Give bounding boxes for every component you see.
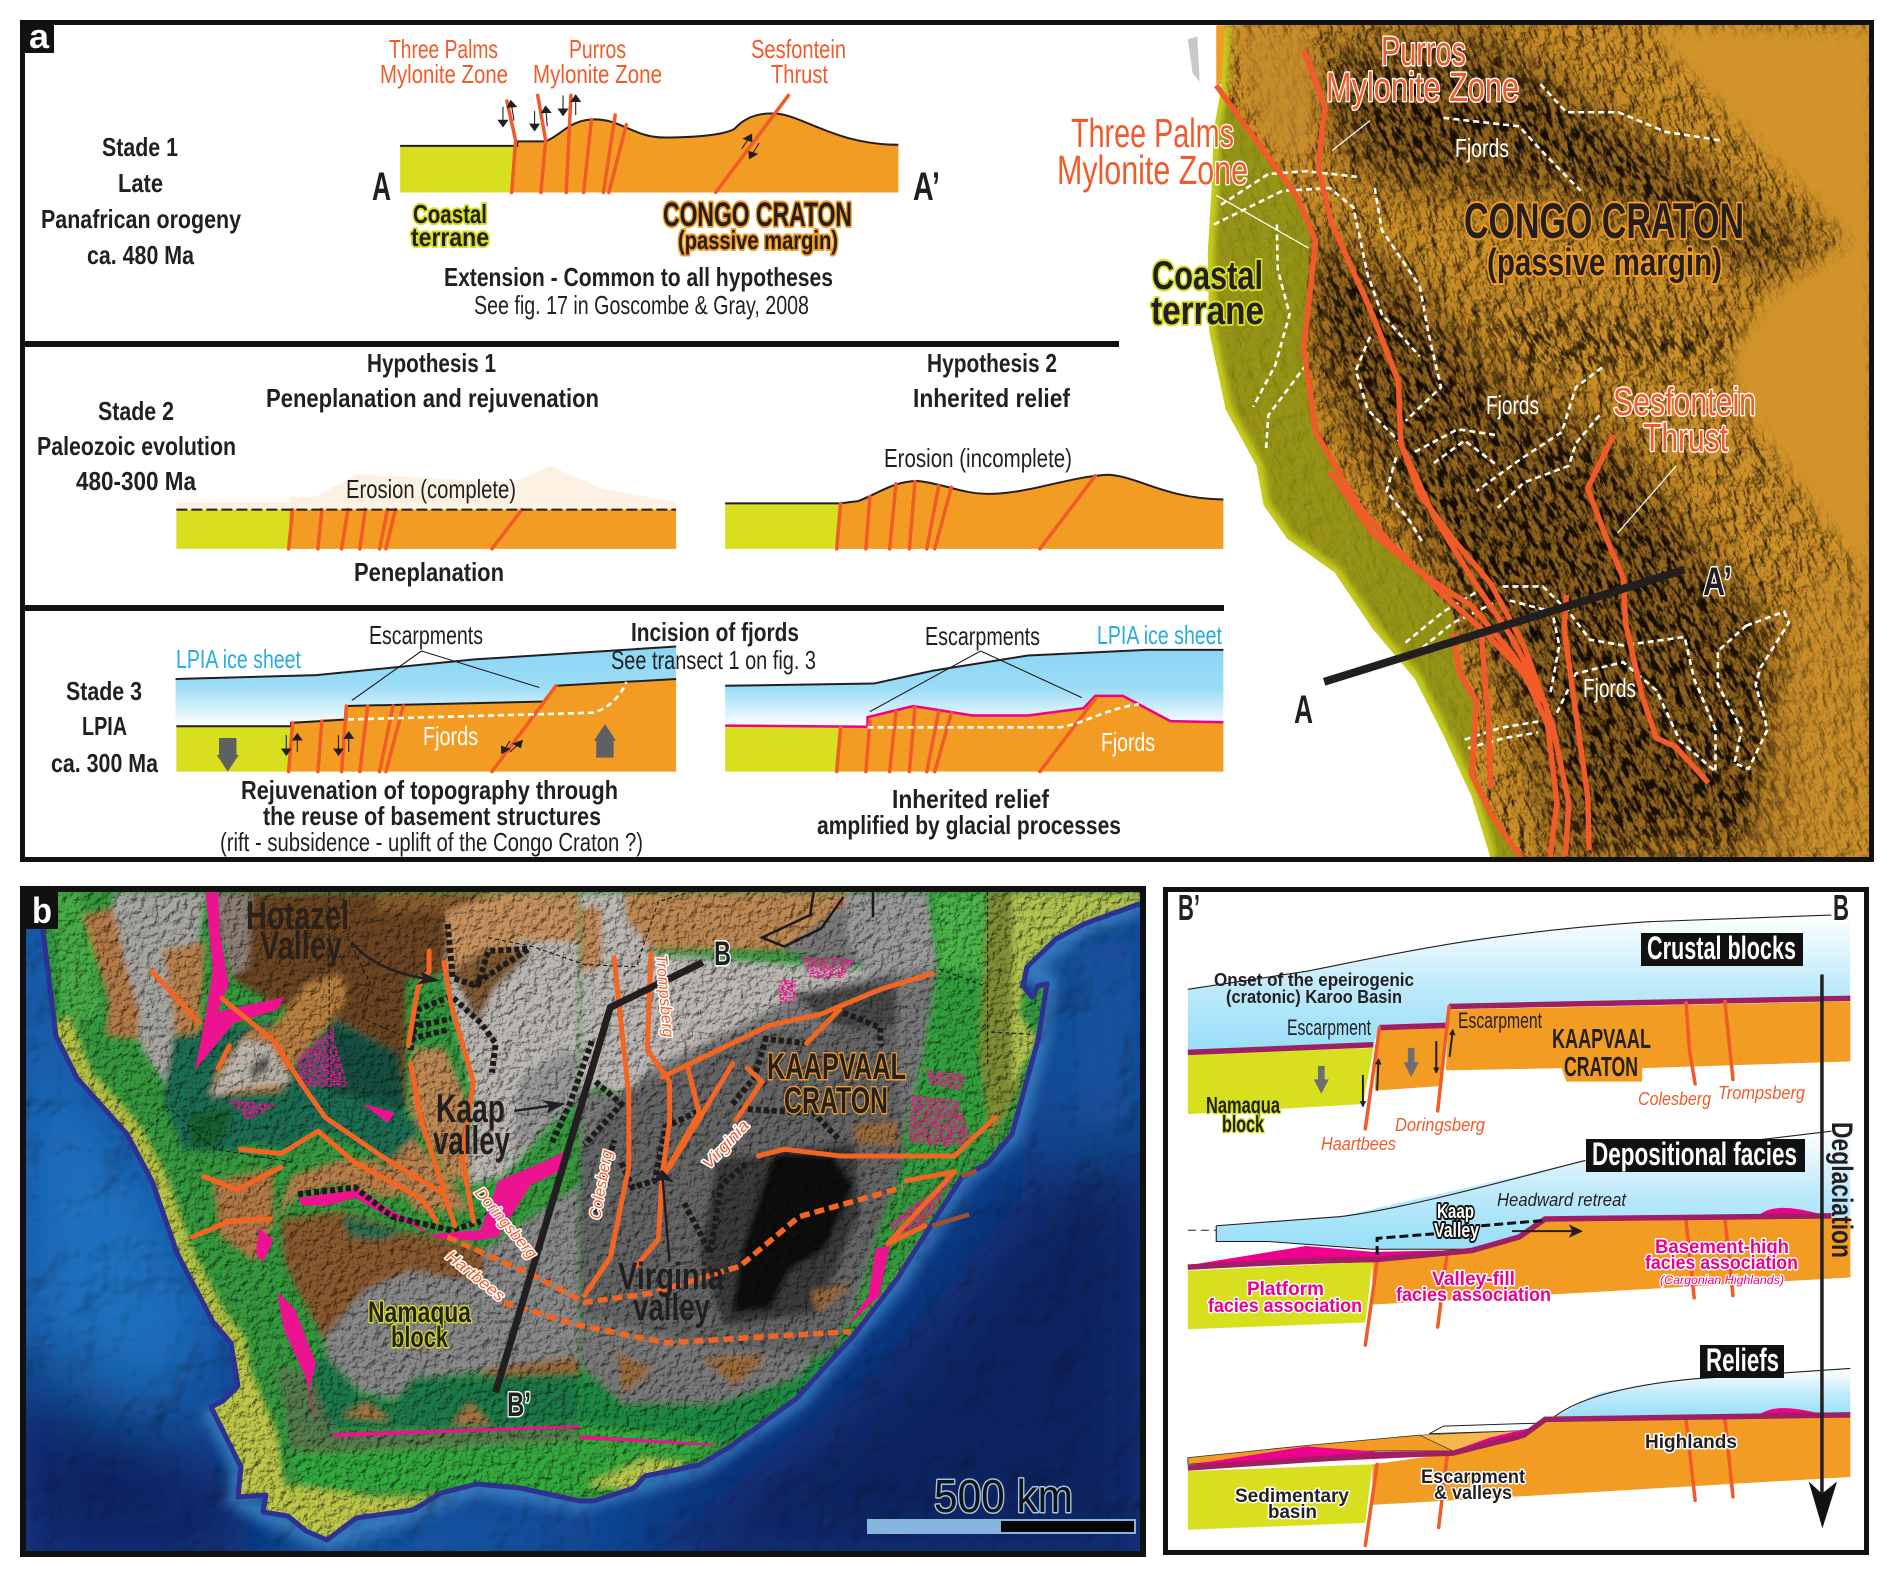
panel b: transect B'-B sections [1166, 887, 1866, 1552]
stage 1 annotations: Mylonite Zone [533, 59, 662, 89]
magenta deposits west [195, 892, 580, 1437]
map a labels: CONGO CRATON [1464, 193, 1744, 249]
ocean [10, 880, 1160, 1570]
section labels: Escarpment [1458, 1008, 1542, 1033]
stage labels: LPIA [82, 711, 127, 741]
map a labels [1057, 28, 1756, 732]
stage 1 annotations: A [372, 165, 391, 209]
map b labels: Hotazel [246, 894, 349, 938]
stage 3 annotations: Fjords [1101, 727, 1155, 757]
stage 3 annotations: See transect 1 on fig. 3 [611, 645, 816, 675]
section labels: Reliefs [1706, 1342, 1779, 1378]
stage 3 hypothesis 2 section [725, 650, 1223, 772]
scale bar: 500 km [934, 1470, 1073, 1522]
map a labels: Purros [1381, 28, 1466, 74]
stage 2 annotations: Peneplanation [354, 557, 504, 587]
stage 1 annotations: Coastal [413, 199, 487, 229]
section labels: Trompsberg [1718, 1083, 1805, 1103]
section labels: (cratonic) Karoo Basin [1226, 987, 1402, 1007]
stage labels: Stade 2 [98, 396, 174, 426]
land east half [580, 892, 1142, 1493]
map b labels: Valley [260, 924, 343, 968]
section labels: Onset of the epeirogenic [1214, 970, 1414, 990]
map a dark relief zones [1304, 25, 1840, 857]
map a labels: Thrust [1643, 417, 1728, 460]
map a labels: Mylonite Zone [1057, 147, 1248, 193]
stage 3 annotations: Fjords [423, 721, 478, 751]
stage 2 hypothesis 1 section [176, 466, 676, 549]
label b [24, 890, 58, 931]
stage labels: Late [118, 168, 163, 198]
coastline [43, 886, 1142, 1540]
stage 1 annotations: Mylonite Zone [380, 59, 508, 89]
map b labels: Virginia [699, 1117, 753, 1173]
section labels: (Cargonian Highlands) [1660, 1273, 1784, 1287]
deglaciation arrow [1809, 974, 1837, 1528]
section labels: block [1222, 1111, 1264, 1137]
stage 3 annotations: Inherited relief [892, 784, 1049, 814]
section labels: CRATON [1564, 1051, 1638, 1082]
section labels: Platform [1247, 1279, 1324, 1300]
stage 3 annotations: (rift - subsidence - uplift of the Congo Craton ?) [220, 827, 643, 857]
section labels: Sedimentary [1235, 1486, 1349, 1507]
stage 2 annotations: Peneplanation and rejuvenation [266, 383, 599, 413]
stage labels [37, 132, 241, 778]
map b labels: Doringsberg [471, 1185, 540, 1262]
section labels: Basement-high [1655, 1237, 1789, 1258]
map a labels: Sesfontein [1613, 381, 1756, 424]
label a [24, 18, 54, 56]
map a faults and fjords [1214, 51, 1789, 859]
map b labels: Colesberg [587, 1149, 616, 1221]
magenta deposits east [580, 957, 973, 1446]
section labels: B [1833, 887, 1849, 928]
map a coastal terrane wedge [1197, 25, 1519, 864]
stage 1 cross section [400, 95, 898, 192]
section labels: Kaap [1437, 1201, 1474, 1223]
section labels: Valley [1434, 1220, 1480, 1242]
section labels: Headward retreat [1497, 1190, 1627, 1210]
land west half [52, 892, 580, 1540]
map a labels: A’ [1703, 560, 1732, 604]
section labels: Colesberg [1638, 1089, 1711, 1109]
section labels: Highlands [1645, 1432, 1737, 1453]
map b labels [246, 894, 906, 1424]
valleys dashed outline [298, 924, 880, 1253]
stage 1 annotations: CONGO CRATON [663, 196, 852, 234]
panel b: southern Africa map [10, 880, 1160, 1570]
section crustal blocks [1188, 915, 1850, 1129]
stage 2 annotations [266, 348, 1072, 587]
section labels: facies association [1396, 1285, 1551, 1306]
section labels: Depositional facies [1592, 1136, 1797, 1172]
section labels: Crustal blocks [1647, 930, 1796, 966]
section labels [1178, 887, 1858, 1523]
stage 3 hypothesis 1 section [176, 647, 676, 772]
map a labels: (passive margin) [1487, 242, 1722, 284]
map a labels: A [1294, 688, 1313, 732]
section labels: KAAPVAAL [1552, 1023, 1651, 1054]
section labels: facies association [1645, 1253, 1798, 1274]
section labels: Doringsberg [1395, 1115, 1485, 1135]
land colour zones [20, 886, 1146, 1558]
map b labels: valley [433, 1119, 511, 1163]
transect B-B' [496, 962, 703, 1392]
stage labels: 480-300 Ma [76, 466, 196, 496]
section labels: B’ [1178, 887, 1200, 928]
faults [152, 951, 995, 1296]
stage 1 annotations: (passive margin) [678, 225, 838, 255]
borders [141, 892, 1032, 1163]
stage 1 annotations: Three Palms [389, 34, 498, 64]
section labels: Haartbees [1321, 1134, 1396, 1154]
map b labels: B [714, 935, 731, 973]
map b labels: Trompsberg [652, 954, 676, 1038]
stage 3 annotations: Incision of fjords [631, 617, 799, 647]
map b labels: Namaqua [368, 1296, 471, 1329]
section labels: & valleys [1434, 1483, 1512, 1504]
stage labels: Stade 3 [66, 676, 142, 706]
stage labels: ca. 480 Ma [87, 240, 194, 270]
stage 2 annotations: Erosion (incomplete) [884, 443, 1072, 473]
panel a frame and dividers [22, 22, 1872, 860]
map a labels: Fjords [1455, 133, 1509, 163]
section labels: Valley-fill [1432, 1269, 1515, 1290]
stage 1 annotations: Purros [569, 34, 626, 64]
section depositional facies [1188, 1130, 1850, 1345]
section labels: basin [1268, 1502, 1317, 1523]
panel a: stages cross-sections [22, 22, 1872, 860]
stage labels: Paleozoic evolution [37, 431, 236, 461]
stage 3 annotations: LPIA ice sheet [176, 644, 302, 674]
section labels: Escarpment [1287, 1015, 1371, 1040]
map b labels: Kaap [436, 1087, 505, 1131]
section labels: Deglaciation [1825, 1122, 1858, 1258]
stage 1 annotations [372, 34, 940, 320]
stage 1 annotations: A’ [913, 165, 940, 209]
stage 1 annotations: See fig. 17 in Goscombe & Gray, 2008 [474, 290, 809, 320]
stage labels: Stade 1 [102, 132, 178, 162]
section labels: Escarpment [1421, 1467, 1526, 1488]
stage 3 annotations: LPIA ice sheet [1097, 620, 1223, 650]
stage 2 annotations: Erosion (complete) [346, 474, 516, 504]
section labels: Namaqua [1206, 1092, 1280, 1118]
stage 1 annotations: Sesfontein [751, 34, 846, 64]
map a labels: Fjords [1583, 673, 1636, 703]
map b labels: Hartbees [442, 1248, 508, 1305]
stage 3 annotations: Escarpments [925, 621, 1040, 651]
stage 3 annotations: the reuse of basement structures [263, 801, 601, 831]
scale bar [867, 1470, 1136, 1534]
map a labels: terrane [1151, 289, 1264, 333]
map b labels: KAAPVAAL [767, 1046, 906, 1087]
stage 2 annotations: Hypothesis 2 [927, 348, 1057, 378]
stage 1 annotations: Thrust [771, 59, 829, 89]
stage 2 hypothesis 2 section [725, 475, 1223, 549]
label b: b [32, 890, 52, 931]
stage 3 annotations: amplified by glacial processes [817, 810, 1121, 840]
map a labels: Fjords [1486, 390, 1539, 420]
map b labels: valley [633, 1287, 710, 1329]
section labels: facies association [1208, 1296, 1362, 1317]
map b labels: block [391, 1321, 448, 1354]
map a: Congo Craton relief [1060, 25, 1869, 857]
stage labels: ca. 300 Ma [51, 748, 158, 778]
stage 2 annotations: Inherited relief [913, 383, 1070, 413]
stage 3 annotations [176, 617, 1223, 857]
map b labels: B’ [507, 1386, 531, 1424]
stage 1 annotations: Extension - Common to all hypotheses [444, 262, 833, 292]
map b labels: Virginia [618, 1256, 725, 1298]
map a labels: Three Palms [1071, 110, 1234, 156]
map b labels: CRATON [784, 1080, 888, 1121]
stage 1 annotations: terrane [411, 222, 489, 252]
stage 3 annotations: Escarpments [369, 620, 483, 650]
map a labels: Coastal [1152, 254, 1263, 298]
stage labels: Panafrican orogeny [41, 204, 241, 234]
label a: a [29, 18, 50, 56]
map a smooth plains [1230, 28, 1874, 859]
map a labels: Mylonite Zone [1326, 64, 1519, 110]
stage 3 annotations: Rejuvenation of topography through [241, 775, 618, 805]
stage 2 annotations: Hypothesis 1 [367, 348, 496, 378]
section reliefs [1188, 1368, 1850, 1545]
